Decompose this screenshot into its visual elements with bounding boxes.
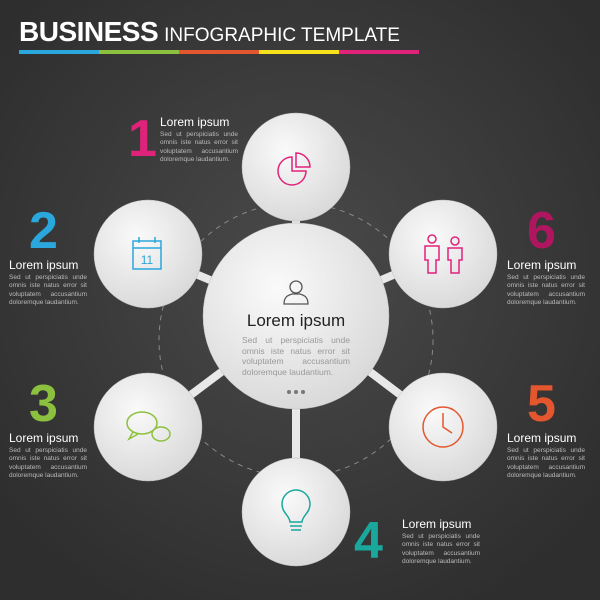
icon: bulb [282, 490, 310, 530]
icon: calendar: 11 [141, 253, 154, 267]
center text: Sed ut perspiciatis unde omnis iste natus error sit voluptatem accusantium doloremque laudantium. [242, 335, 350, 376]
item 6: Sed ut perspiciatis unde omnis iste natus error sit voluptatem accusantium doloremque laudantium. [507, 274, 585, 306]
item 4: Lorem ipsum [402, 517, 471, 531]
item 4: Sed ut perspiciatis unde omnis iste natus error sit voluptatem accusantium doloremque laudantium. [402, 533, 480, 565]
item 2 [9, 202, 87, 306]
item 6: Lorem ipsum [507, 258, 576, 272]
icon: clock [423, 407, 463, 447]
item 6 [507, 202, 585, 306]
item 1 [128, 110, 238, 168]
item 3: Lorem ipsum [9, 431, 78, 445]
icon: pie [278, 153, 310, 185]
item 1: Lorem ipsum [160, 115, 229, 129]
item 5: 5 [527, 375, 556, 433]
item 5: Lorem ipsum [507, 431, 576, 445]
item 5 [507, 375, 585, 479]
icon: chat [127, 412, 170, 441]
center text: Lorem ipsum [247, 311, 345, 330]
item 3: 3 [29, 375, 58, 433]
icon: people [425, 235, 462, 273]
item 2: 2 [29, 202, 58, 260]
item 1: Sed ut perspiciatis unde omnis iste natus error sit voluptatem accusantium doloremque laudantium. [160, 131, 238, 163]
item 4 [354, 512, 480, 570]
item 2: Lorem ipsum [9, 258, 78, 272]
item 3 [9, 375, 87, 479]
item 1: 1 [128, 110, 157, 168]
center text [242, 311, 350, 376]
item 4: 4 [354, 512, 383, 570]
icon: calendar [133, 237, 161, 269]
item 6: 6 [527, 202, 556, 260]
title: BUSINESS INFOGRAPHIC TEMPLATE [19, 16, 400, 47]
item 5: Sed ut perspiciatis unde omnis iste natus error sit voluptatem accusantium doloremque laudantium. [507, 447, 585, 479]
item 2: Sed ut perspiciatis unde omnis iste natus error sit voluptatem accusantium doloremque laudantium. [9, 274, 87, 306]
item 3: Sed ut perspiciatis unde omnis iste natus error sit voluptatem accusantium doloremque laudantium. [9, 447, 87, 479]
icon: user [284, 281, 308, 304]
